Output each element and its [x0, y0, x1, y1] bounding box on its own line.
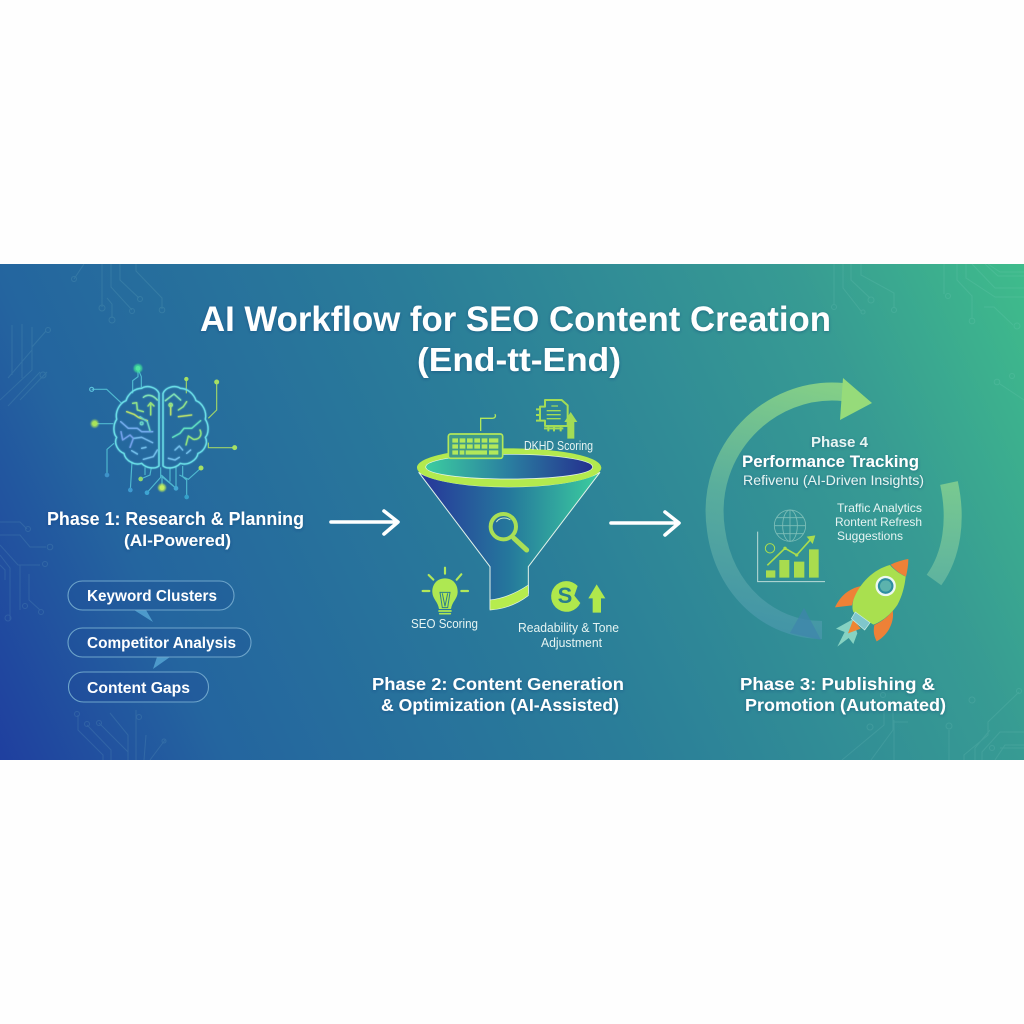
heading: phase 1: Phase 1: Research & Planning: [47, 509, 304, 529]
axes: [758, 532, 825, 582]
title: (End-tt-End): [417, 341, 621, 378]
text: phase 4: Phase 4: [811, 435, 868, 451]
fins: [835, 586, 862, 607]
icon: globe and bar chart: [758, 510, 825, 582]
funnel rim: [417, 448, 601, 487]
porthole: [877, 577, 895, 595]
brain right folds: [140, 394, 201, 460]
text: phase 4: Performance Tracking: [742, 452, 919, 471]
icon: magnifier: [491, 514, 527, 550]
icon: S badge with up arrow: S: [558, 583, 572, 608]
trend line: [767, 538, 812, 565]
heading: phase 3: Phase 3: Publishing &: [740, 674, 935, 694]
icon: keyboard: [448, 414, 503, 458]
icon: AI brain with circuit nodes: [90, 364, 237, 499]
globe: [774, 510, 806, 541]
banner background: [0, 264, 1024, 760]
pill: keyword clusters: Keyword Clusters: [87, 588, 217, 605]
label: readability and tone adjustment: Adjustment: [541, 636, 603, 650]
glowing nodes: [90, 364, 237, 499]
title: [200, 300, 831, 378]
heading: phase 3: [740, 674, 946, 715]
brain left folds: [121, 395, 157, 459]
pale flame: [836, 619, 857, 647]
heading: phase 3: Promotion (Automated): [745, 695, 946, 715]
pill: keyword clusters: [68, 581, 234, 622]
orange flame: [848, 619, 861, 633]
brain outline: [114, 387, 208, 468]
label: readability and tone adjustment: [518, 621, 619, 650]
pill: competitor analysis: Competitor Analysis: [87, 635, 236, 652]
icon: chip with arrow: [536, 400, 577, 439]
title: AI Workflow for SEO Content Creation: [200, 300, 831, 339]
background circuit traces: [0, 264, 1024, 760]
spout band: [490, 585, 528, 610]
icon: S badge with up arrow: [551, 581, 605, 613]
icon: rocket: [835, 559, 908, 647]
heading: phase 2: [372, 674, 624, 715]
arrow: phase 1 to phase 2: [331, 511, 398, 534]
pills: phase 1 items: [68, 581, 251, 702]
pill: content gaps: Content Gaps: [87, 680, 190, 697]
body: [852, 565, 906, 625]
text: analytics list: [835, 501, 922, 543]
icon: funnel: [417, 448, 601, 610]
label: DKHD scoring: DKHD Scoring: [524, 439, 593, 453]
heading: phase 2: Phase 2: Content Generation: [372, 674, 624, 694]
heading: phase 1: (AI-Powered): [124, 531, 231, 550]
text: phase 4: [742, 435, 924, 488]
text: analytics list: Suggestions: [837, 529, 903, 543]
label: SEO scoring: SEO Scoring: [411, 617, 478, 631]
heading: phase 2: & Optimization (AI-Assisted): [381, 695, 619, 715]
icon: light bulb: [423, 568, 468, 614]
circuit leads: [92, 369, 235, 497]
label: readability and tone adjustment: Readability & Tone: [518, 621, 619, 635]
nose cone: [891, 559, 908, 577]
pill: competitor analysis: [68, 628, 251, 669]
bars: [766, 549, 819, 578]
arrow: phase 2 to phase 3: [611, 512, 679, 535]
pill: content gaps: [68, 672, 208, 702]
arrow: performance cycle ring: [715, 378, 953, 640]
funnel cone and spout: [419, 472, 600, 609]
text: analytics list: Traffic Analytics: [837, 501, 922, 515]
nozzle: [851, 612, 870, 630]
text: analytics list: Rontent Refresh: [835, 515, 922, 529]
heading: phase 1: [47, 509, 304, 550]
text: phase 4: Refivenu (AI-Driven Insights): [743, 473, 924, 488]
